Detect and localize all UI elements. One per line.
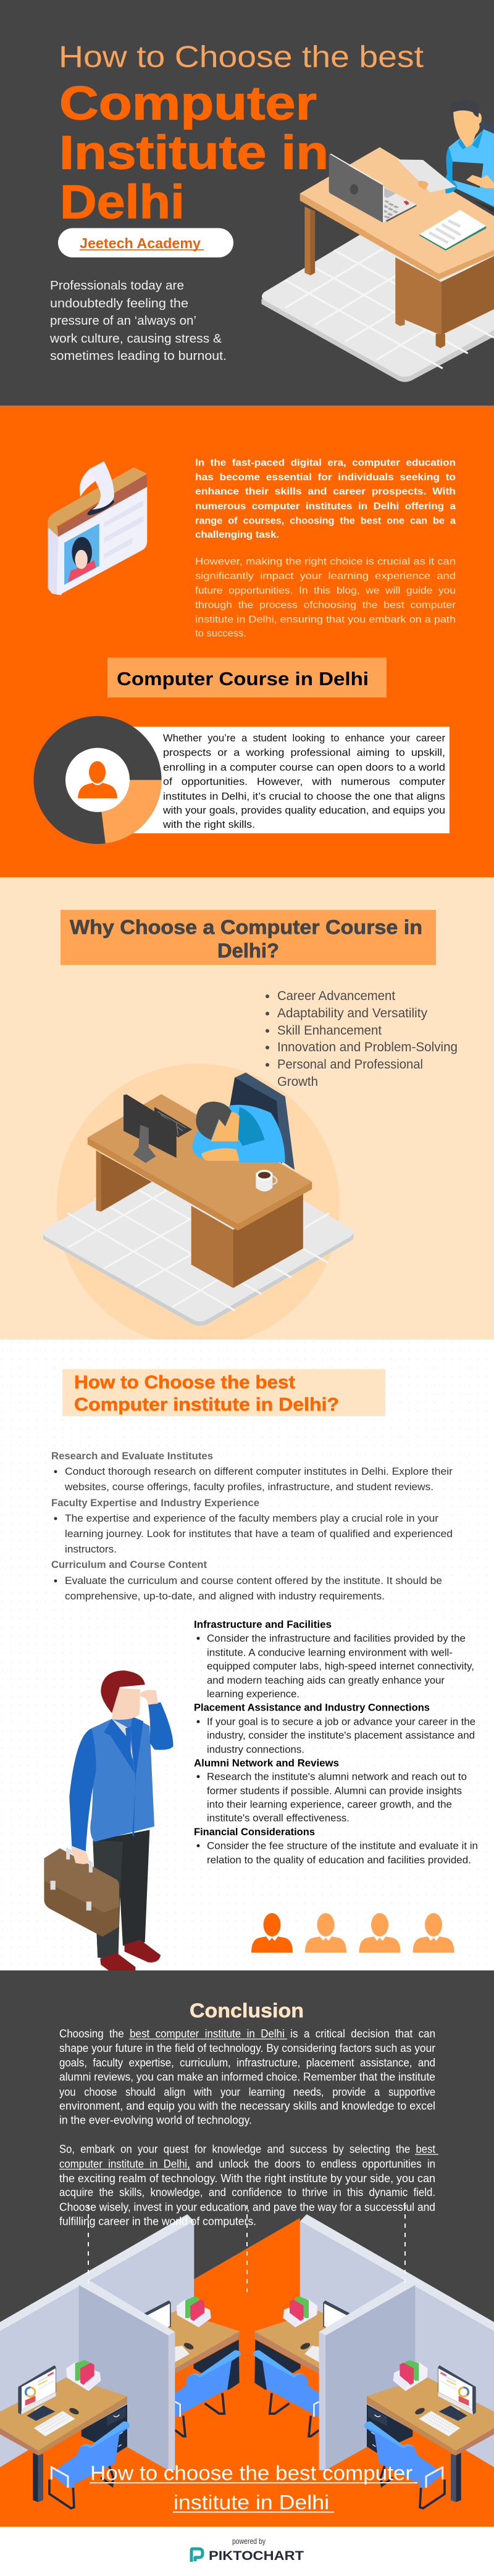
- link: how to choose: institute in Delhi: [174, 2491, 329, 2514]
- heading: computer course: Computer Course in Delhi: [117, 668, 369, 690]
- text block: intro bold: has become essential for individuals seeking to: [195, 472, 456, 483]
- heading: computer course: [107, 657, 387, 698]
- text block: intro regular: institute in Delhi, ensuring that you embark on a path: [195, 615, 456, 625]
- text box: whether: of opportunities. However, with numerous computer: [163, 777, 446, 788]
- text block: factors one to three: comprehensive, up-to-date, and aligned with industry requirements.: [65, 1590, 385, 1602]
- intro paragraph: work culture, causing stress &: [49, 332, 222, 346]
- title: [59, 41, 424, 228]
- text block: intro regular: through the process ofchoosing the best computer: [195, 600, 456, 611]
- text block: intro bold: challenging task.: [195, 530, 279, 540]
- text block: conclusion: shape your future in the field of technology. By considering factors such as your: [59, 2042, 435, 2054]
- link: how to choose: How to choose the best computer: [90, 2462, 412, 2485]
- text block: intro regular: However, making the right choice is crucial as it can: [195, 557, 456, 567]
- text block: intro regular: significantly impact your learning experience and: [195, 571, 456, 581]
- text block: factors one to three: [51, 1450, 453, 1602]
- text block: conclusion: in the ever-evolving world of technology.: [59, 2114, 252, 2127]
- panel: introduction: [0, 406, 494, 877]
- text box: whether: enrolling in a computer course can open doors to a world: [163, 762, 445, 773]
- text block: conclusion: fulfilling career in the world of computers.: [59, 2215, 256, 2228]
- intro paragraph: Professionals today are: [50, 279, 184, 293]
- text block: factors four to seven: Research the institute's alumni network and reach out to: [207, 1772, 467, 1783]
- icon: person: [305, 1913, 346, 1953]
- icon: person: [359, 1913, 400, 1953]
- text box: whether: Whether you’re a student looking to enhance your career: [163, 733, 446, 744]
- text block: factors one to three: Curriculum and Course Content: [51, 1559, 207, 1570]
- heading: conclusion: Conclusion: [190, 1999, 304, 2022]
- footer: powered by: powered by: [232, 2536, 266, 2546]
- illustration: businessman with briefcase: [44, 1670, 174, 1970]
- icon: id card: [48, 461, 147, 595]
- text block: factors one to three: learning journey. Look for institutes that have a team of qualified and experienced: [65, 1528, 453, 1540]
- intro paragraph: [49, 279, 227, 363]
- text block: factors one to three: The expertise and experience of the faculty members play a crucial role in your: [65, 1512, 438, 1524]
- text block: intro bold: numerous computer institutes in Delhi offering a: [195, 501, 456, 512]
- text block: factors four to seven: industry connections.: [207, 1744, 304, 1755]
- heading: why choose: Why Choose a Computer Course in: [70, 916, 422, 938]
- button: Jeetech Academy: [58, 228, 233, 257]
- title: Delhi: [60, 175, 185, 228]
- text block: intro bold: In the fast-paced digital era, computer education: [195, 458, 456, 468]
- illustration background circle: [57, 1064, 340, 1346]
- panel: why choose: [0, 877, 494, 1346]
- list: reasons: Personal and Professional: [277, 1057, 423, 1072]
- text block: factors four to seven: If your goal is to secure a job or advance your career in the: [207, 1716, 475, 1727]
- left cubicles: [0, 2214, 241, 2508]
- footer: powered by: PIKTOCHART: [209, 2549, 304, 2563]
- title: Institute in: [59, 126, 329, 179]
- panel: conclusion: [0, 1970, 494, 2527]
- list: reasons: [266, 989, 458, 1089]
- text box: whether: with the right skills.: [162, 819, 255, 830]
- text block: conclusion: the exciting realm of technology. With the right institute by your side, you can: [59, 2172, 435, 2185]
- intro paragraph: pressure of an ‘always on’: [50, 314, 196, 328]
- heading: why choose: Delhi?: [217, 940, 279, 962]
- text block: factors four to seven: institute. A conducive learning environment with well-: [207, 1647, 453, 1658]
- text block: intro regular: future opportunities. In this blog, we will guide you: [195, 585, 456, 596]
- text block: factors one to three: websites, course offerings, faculty profiles, infrastructure, and student reviews.: [64, 1481, 433, 1493]
- text block: factors four to seven: relation to the quality of education and facilities provided.: [207, 1854, 471, 1865]
- text block: conclusion: [59, 2028, 438, 2228]
- text block: factors four to seven: Financial Considerations: [194, 1827, 315, 1838]
- text block: factors one to three: Evaluate the curriculum and course content offered by the institute. It should be: [65, 1575, 442, 1586]
- intro paragraph: sometimes leading to burnout.: [50, 349, 227, 363]
- text block: intro regular: to success.: [195, 628, 246, 639]
- text block: conclusion: acquire the skills, knowledge, and confidence to thrive in this dynamic field.: [59, 2186, 435, 2199]
- illustration: office cubicles: [0, 2205, 494, 2527]
- list: reasons: Innovation and Problem-Solving: [277, 1040, 458, 1054]
- list: reasons: Career Advancement: [277, 989, 395, 1003]
- intro paragraph: undoubtedly feeling the: [50, 297, 188, 311]
- text block: conclusion: environment, and equip you with the necessary skills and knowledge to excel: [59, 2100, 435, 2112]
- text block: conclusion: alumni reviews, you can make an informed choice. Remember that the institute: [59, 2071, 435, 2083]
- text block: factors four to seven: learning experience.: [207, 1688, 299, 1699]
- text block: factors four to seven: and modern teaching aids can greatly enhance your: [207, 1675, 445, 1686]
- title: Computer: [59, 77, 317, 130]
- text block: factors one to three: Research and Evaluate Institutes: [51, 1450, 213, 1462]
- heading: how to choose: How to Choose the best: [74, 1372, 295, 1393]
- heading: how to choose: Computer institute in Delhi?: [74, 1394, 339, 1415]
- text block: conclusion: Choosing the best computer institute in Delhi is a critical decision that can: [59, 2028, 435, 2040]
- text block: factors four to seven: into their learning experience, career growth, and the: [207, 1799, 452, 1810]
- text block: factors four to seven: Placement Assistance and Industry Connections: [194, 1703, 430, 1714]
- text block: factors four to seven: Alumni Network and Reviews: [194, 1758, 339, 1769]
- text box: whether: [124, 727, 450, 833]
- text block: conclusion: goals, faculty expertise, curriculum, infrastructure, placement assistance, and: [59, 2057, 435, 2069]
- panel: how to choose: [0, 1340, 494, 1971]
- text block: factors four to seven: industry, consider the institute's placement assistance and: [207, 1730, 475, 1741]
- text block: conclusion: Choose wisely, invest in your education, and pave the way for a successful and: [59, 2201, 435, 2214]
- list: reasons: Adaptability and Versatility: [277, 1006, 427, 1020]
- icon: person active: [251, 1913, 293, 1953]
- text block: conclusion: computer institute in Delhi, and unlock the doors to endless opportunities in: [59, 2158, 435, 2170]
- heading: why choose: [61, 910, 436, 965]
- text block: intro bold: [195, 458, 456, 540]
- text block: intro bold: range of courses, choosing the best one can be a: [195, 516, 456, 526]
- link: how to choose: [90, 2462, 417, 2514]
- icon: piktochart logo: [191, 2549, 203, 2562]
- text box: whether: with your goals, provides quality education, and equips you: [162, 805, 445, 816]
- text box: whether: prospects or a working professional aiming to upskill,: [163, 748, 445, 759]
- text block: factors one to three: instructors.: [65, 1543, 117, 1555]
- text block: intro bold: enhance their skills and career prospects. With: [195, 486, 456, 497]
- text block: factors one to three: Conduct thorough research on different computer institutes in Delhi. Explore their: [65, 1465, 453, 1477]
- text block: conclusion: you choose should align with your learning needs, provide a supportive: [59, 2086, 435, 2098]
- illustration: person at desk: [261, 100, 494, 382]
- dashed lines: [88, 2205, 405, 2292]
- list: reasons: Skill Enhancement: [277, 1023, 382, 1038]
- list: reasons: Growth: [277, 1075, 318, 1089]
- text block: factors one to three: Faculty Expertise and Industry Experience: [51, 1497, 259, 1509]
- text block: factors four to seven: equipped computer labs, high-speed internet connectivity,: [207, 1661, 474, 1672]
- chart: donut with person icon: [33, 716, 162, 844]
- text box: whether: institutes in Delhi, it’s crucial to choose the one that aligns: [163, 791, 445, 802]
- icons: four people: [251, 1913, 454, 1953]
- text block: factors four to seven: Consider the fee structure of the institute and evaluate it in: [207, 1840, 478, 1851]
- text block: conclusion: So, embark on your quest for knowledge and success by selecting the best: [59, 2143, 435, 2156]
- right cubicles: [253, 2214, 494, 2508]
- text block: factors four to seven: institute's overall effectiveness.: [207, 1812, 350, 1824]
- icon: person: [412, 1913, 454, 1953]
- footer: powered by: [0, 2527, 494, 2576]
- heading: how to choose: [62, 1369, 385, 1416]
- text block: factors four to seven: Consider the infrastructure and facilities provided by the: [207, 1633, 466, 1644]
- text block: factors four to seven: Infrastructure and Facilities: [194, 1619, 332, 1630]
- text block: factors four to seven: [194, 1619, 478, 1865]
- heading line: How to Choose the best: [59, 41, 424, 74]
- illustration: tired man at desk: [43, 1072, 353, 1326]
- text block: intro regular: [195, 557, 456, 639]
- button: Jeetech Academy: Jeetech Academy: [80, 235, 201, 251]
- text block: factors four to seven: former students if possible. Alumni can provide insights: [207, 1785, 462, 1796]
- panel: hero: [0, 0, 494, 406]
